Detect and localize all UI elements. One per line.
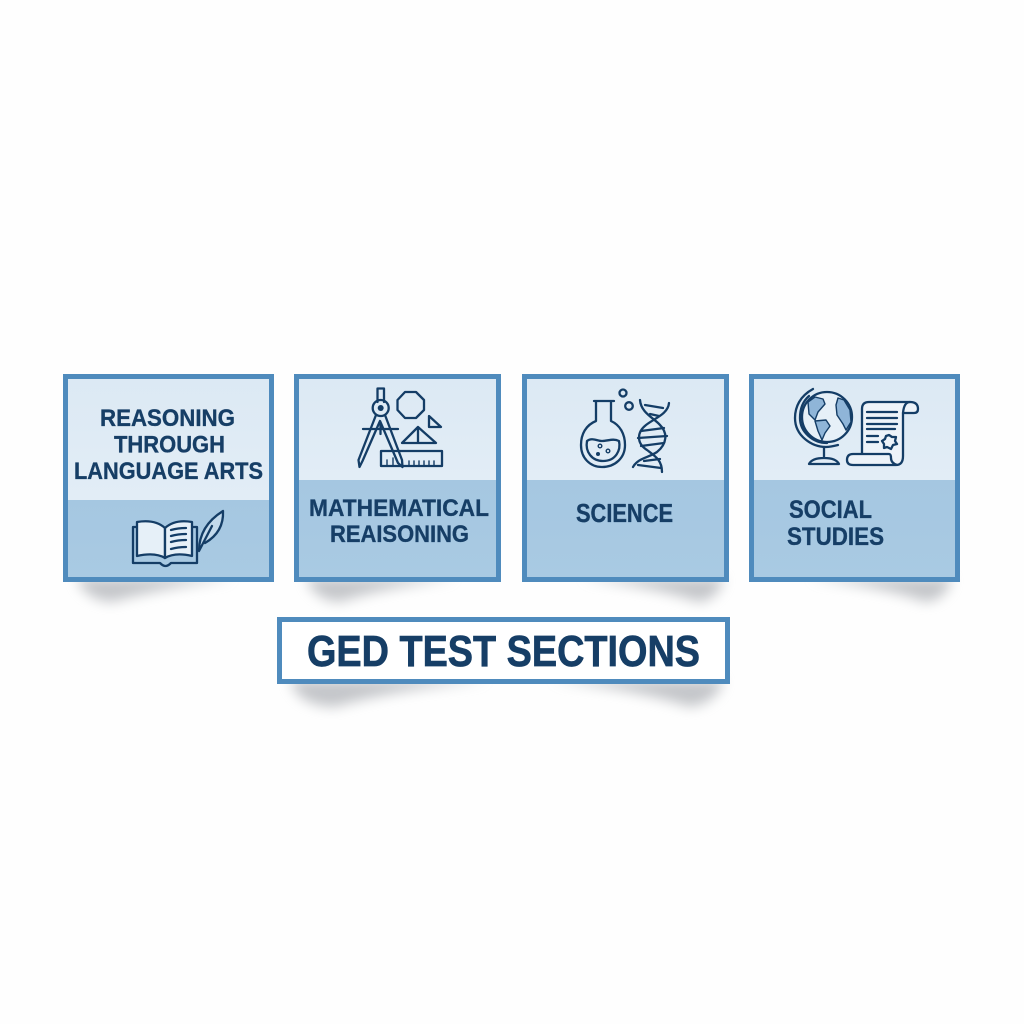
panel: reasoning through language arts bbox=[63, 374, 274, 602]
heading text bbox=[787, 496, 884, 551]
icon: globe bbox=[795, 389, 852, 464]
heading text: REASONING bbox=[100, 405, 235, 432]
heading text: REAISONING bbox=[330, 521, 469, 548]
card shadow bbox=[76, 578, 235, 602]
icon: dna helix bbox=[633, 400, 669, 472]
heading text: SOCIAL bbox=[789, 496, 872, 524]
card shadow bbox=[306, 578, 458, 602]
title banner bbox=[280, 620, 728, 707]
panel: social studies bbox=[749, 374, 960, 602]
heading text: THROUGH bbox=[114, 432, 225, 458]
icon: book and quill bbox=[133, 511, 223, 566]
panel: science bbox=[522, 374, 729, 602]
heading text bbox=[74, 405, 263, 485]
icon: compass and geometry tools bbox=[358, 388, 442, 467]
icon: scroll with seal bbox=[847, 402, 918, 465]
card shadow bbox=[808, 578, 952, 602]
heading text: SCIENCE bbox=[576, 498, 673, 528]
heading text: STUDIES bbox=[787, 523, 884, 551]
panel: mathematical reasoning bbox=[294, 374, 501, 602]
card shadow bbox=[580, 578, 724, 602]
heading text bbox=[309, 495, 489, 548]
heading text: LANGUAGE ARTS bbox=[74, 458, 263, 485]
banner shadow bbox=[290, 680, 724, 707]
title text: GED TEST SECTIONS bbox=[307, 627, 700, 676]
icon: flask and bubbles bbox=[581, 390, 633, 467]
heading text: MATHEMATICAL bbox=[309, 495, 489, 522]
